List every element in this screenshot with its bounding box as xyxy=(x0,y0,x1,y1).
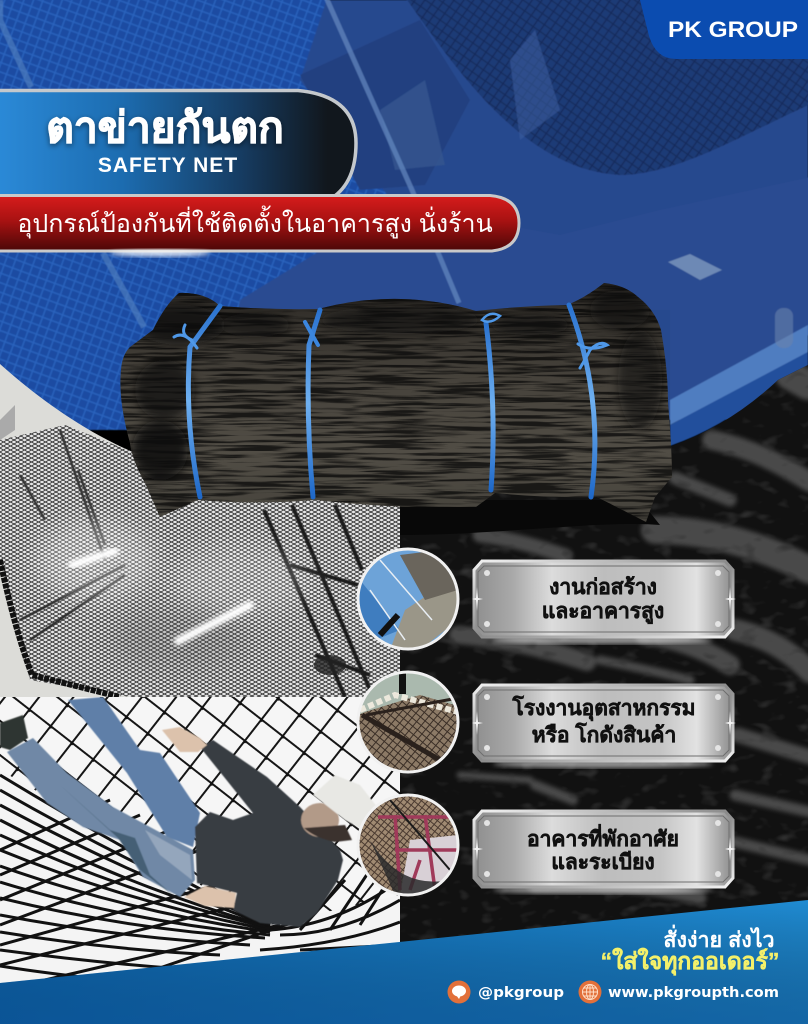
footer band: @pkgroup xyxy=(478,985,564,1001)
circle photo: construction xyxy=(358,549,458,650)
jacket xyxy=(195,740,343,927)
footer band: “ใส่ใจทุกออเดอร์” xyxy=(601,947,779,976)
product: rolled black safety net xyxy=(115,280,675,525)
lower sagging net xyxy=(0,770,400,1000)
footer band xyxy=(0,900,808,1024)
photo: worker falling into safety net xyxy=(0,697,400,1000)
photo: fine mesh net panel xyxy=(0,360,400,700)
metal plate: factory: หรือ โกดังสินค้า xyxy=(532,722,676,747)
title panel: ตาข่ายกันตก xyxy=(46,105,284,152)
title panel xyxy=(0,90,356,198)
metal plate: residential: และระเบียง xyxy=(551,850,655,874)
blue straps xyxy=(174,305,607,497)
red subtitle bar xyxy=(0,196,519,256)
metal plate: residential: อาคารที่พักอาศัย xyxy=(527,823,679,851)
circle photo: residential xyxy=(358,795,458,895)
head and hard hat xyxy=(301,775,378,842)
top-right brand tab xyxy=(640,0,808,59)
hands xyxy=(162,727,236,908)
shoe xyxy=(0,715,28,750)
metal plate: construction xyxy=(472,561,736,644)
metal plate: construction: และอาคารสูง xyxy=(542,600,664,625)
red subtitle bar: อุปกรณ์ป้องกันที่ใช้ติดตั้งในอาคารสูง นั่งร้าน xyxy=(17,205,493,239)
top-right brand tab: PK GROUP xyxy=(668,17,798,42)
icon: globe xyxy=(578,980,602,1004)
title panel: SAFETY NET xyxy=(98,154,238,177)
metal plate: factory xyxy=(472,685,736,768)
footer band: สั่งง่าย ส่งไว xyxy=(663,924,775,952)
jeans legs xyxy=(7,697,200,897)
background: blue construction site photo xyxy=(0,0,808,446)
footer band: www.pkgroupth.com xyxy=(608,985,779,1001)
metal plate: construction: งานก่อสร้าง xyxy=(549,575,657,599)
circle photo: factory xyxy=(358,672,458,772)
background: black rope panel xyxy=(400,360,808,1000)
metal plate: factory: โรงงานอุตสาหกรรม xyxy=(511,695,696,722)
icon: line chat xyxy=(448,980,470,1004)
metal plate: residential xyxy=(472,811,736,894)
